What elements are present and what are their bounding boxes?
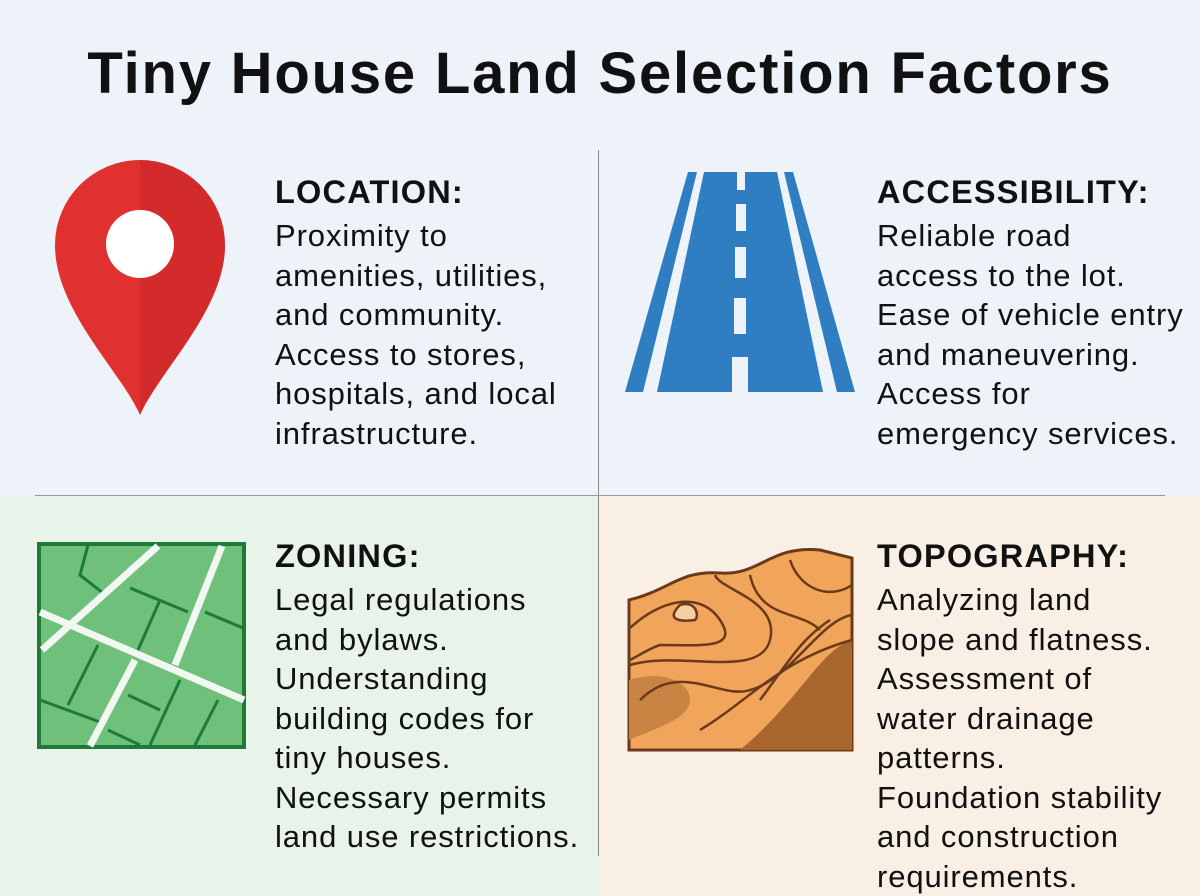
text: topography: TOPOGRAPHY: (877, 538, 1129, 574)
text: location (275, 174, 557, 450)
text: location: Proximity to (275, 218, 448, 253)
text: zoning: and bylaws. (275, 622, 449, 656)
text: topography (877, 538, 1162, 894)
text: location: hospitals, and local (275, 376, 557, 411)
text: topography: Analyzing land (877, 582, 1091, 617)
text: zoning: ZONING: (275, 538, 421, 574)
text: topography: and construction (877, 819, 1119, 854)
title: Tiny House Land Selection Factors (87, 41, 1113, 106)
icon: topography (628, 548, 854, 752)
text: zoning (275, 538, 579, 854)
text: topography: Assessment of (877, 661, 1092, 696)
text: zoning: Understanding (275, 661, 488, 696)
text: accessibility: Reliable road (877, 218, 1071, 253)
text: location: LOCATION: (275, 174, 464, 210)
text: accessibility: Access for (877, 376, 1031, 411)
text: zoning: tiny houses. (275, 740, 451, 775)
text: zoning: land use restrictions. (275, 819, 579, 854)
text: location: and community. (275, 297, 504, 332)
text: accessibility: Ease of vehicle entry (877, 297, 1184, 332)
text: topography: requirements. (877, 858, 1078, 894)
text: topography: Foundation stability (877, 780, 1162, 814)
text: location: infrastructure. (275, 416, 478, 450)
text: accessibility: emergency services. (877, 416, 1178, 450)
text: location: amenities, utilities, (275, 258, 547, 292)
text: zoning: Legal regulations (275, 582, 526, 617)
text: location: Access to stores, (275, 336, 526, 372)
text: topography: water drainage (877, 700, 1095, 736)
text: zoning: Necessary permits (275, 780, 547, 814)
text: topography: slope and flatness. (877, 622, 1153, 656)
text: topography: patterns. (877, 740, 1006, 775)
icon: zoning map (37, 542, 246, 749)
text: accessibility: ACCESSIBILITY: (877, 174, 1150, 210)
text: zoning: building codes for (275, 700, 534, 736)
text: accessibility: and maneuvering. (877, 336, 1140, 372)
icon: road (625, 172, 855, 392)
background: zoning panel (0, 496, 599, 896)
icon: location pin (55, 160, 225, 415)
background: topography panel (599, 496, 1200, 896)
text: accessibility (877, 174, 1184, 450)
text: accessibility: access to the lot. (877, 258, 1126, 292)
